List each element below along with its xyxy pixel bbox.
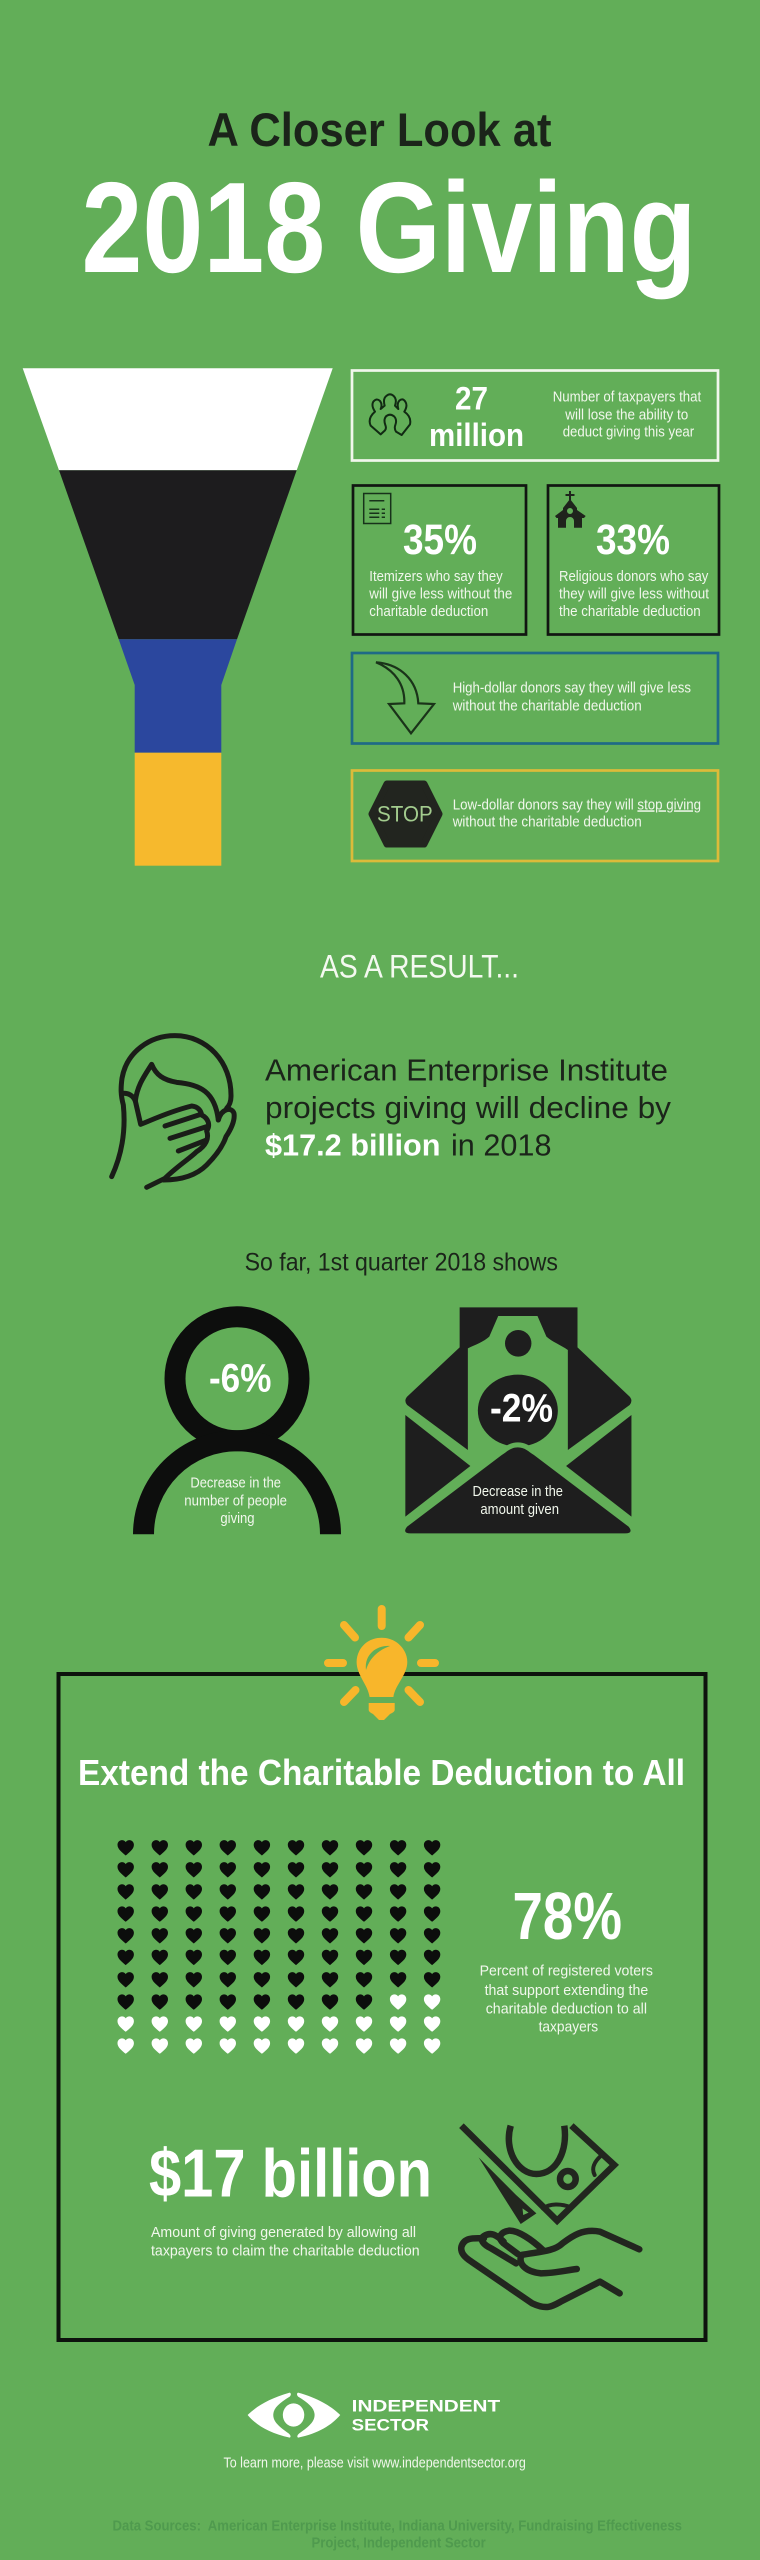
heading: first quarter: So far, 1st quarter 2018 shows <box>245 1249 558 1277</box>
description: giving generated: taxpayers to claim the charitable deduction <box>151 2243 420 2260</box>
wordmark: SECTOR <box>352 2416 429 2435</box>
text: data sources: Project, Independent Sector <box>312 2535 486 2552</box>
description: itemizers: charitable deduction <box>369 603 488 620</box>
icon: money in hand <box>461 2126 639 2307</box>
description: registered voters: Percent of registered voters <box>480 1963 653 1980</box>
panel: religious donors 33% <box>548 486 719 634</box>
logo: Independent Sector <box>248 2393 501 2438</box>
stat: 33%: 33% <box>596 516 670 564</box>
icon: people <box>370 394 410 435</box>
text: AEI projection: in 2018 <box>451 1128 552 1163</box>
title: A Closer Look at <box>208 103 552 156</box>
heading: as a result: AS A RESULT... <box>320 948 519 984</box>
text: AEI projection <box>265 1053 671 1163</box>
text: AEI projection: $17.2 billion <box>265 1128 440 1163</box>
description: high-dollar donors: without the charitable deduction <box>452 697 642 714</box>
description: registered voters: charitable deduction to all <box>486 2000 647 2017</box>
description: low-dollar donors: Low-dollar donors say they will stop giving <box>453 796 701 813</box>
icon: person <box>144 1317 330 1534</box>
text: data sources <box>112 2518 682 2552</box>
description: religious donors <box>559 568 710 620</box>
description: high-dollar donors: High-dollar donors say they will give less <box>453 680 691 697</box>
icon: stop sign: STOP <box>377 802 433 827</box>
stat: $17 billion: $17 billion <box>149 2136 432 2212</box>
text: learn more: To learn more, please visit www.independentsector.org <box>224 2455 526 2472</box>
heading: extend: Extend the Charitable Deduction to All <box>78 1752 685 1793</box>
stat: 78%: 78% <box>512 1879 622 1954</box>
icon: eye <box>248 2393 340 2438</box>
panel: extend the charitable deduction <box>58 1609 706 2340</box>
panel: envelope stat <box>405 1307 631 1533</box>
description: itemizers: will give less without the <box>368 585 512 602</box>
stat: 27 million: million <box>429 417 524 453</box>
description: religious donors: Religious donors who say <box>559 568 709 585</box>
stat: 27 million <box>429 380 524 453</box>
description: taxpayers: will lose the ability to <box>564 406 688 423</box>
icon: down arrow <box>376 662 434 733</box>
description: religious donors: the charitable deduction <box>559 603 701 620</box>
description: amount given: Decrease in the <box>472 1483 563 1500</box>
icon: document <box>364 494 391 524</box>
description: high-dollar donors <box>452 680 691 714</box>
description: itemizers: Itemizers who say they <box>369 568 503 585</box>
wordmark <box>352 2396 501 2435</box>
description: people giving: Decrease in the <box>190 1475 281 1492</box>
text: AEI projection: American Enterprise Institute <box>265 1053 668 1088</box>
icon: stop sign <box>372 784 439 844</box>
panel: 27 million taxpayers <box>352 370 718 460</box>
description: religious donors: they will give less without <box>559 585 710 602</box>
panel: low-dollar donors <box>352 770 718 861</box>
description: amount given <box>472 1483 563 1518</box>
title <box>82 103 696 300</box>
description: taxpayers: deduct giving this year <box>563 424 694 441</box>
stat: -2%: -2% <box>490 1387 553 1431</box>
description: registered voters: taxpayers <box>539 2019 598 2036</box>
description: people giving: giving <box>220 1510 255 1527</box>
wordmark: INDEPENDENT <box>352 2396 501 2415</box>
stat: 27 million: 27 <box>455 380 488 416</box>
description: people giving: number of people <box>184 1492 287 1509</box>
description: low-dollar donors: without the charitable deduction <box>452 814 642 831</box>
panel: person stat <box>144 1317 330 1534</box>
panel: itemizers 35% <box>353 486 526 634</box>
description: amount given: amount given <box>480 1501 559 1518</box>
stat: 35%: 35% <box>403 516 477 564</box>
description: registered voters <box>480 1963 653 2036</box>
description: taxpayers <box>553 389 702 441</box>
stat: -6%: -6% <box>209 1357 271 1401</box>
description: taxpayers: Number of taxpayers that <box>553 389 702 406</box>
funnel chart <box>23 368 333 866</box>
description: low-dollar donors <box>452 796 701 831</box>
panel: high-dollar donors <box>352 653 718 744</box>
description: itemizers <box>368 568 512 620</box>
icon: envelope with tag <box>405 1307 631 1533</box>
description: registered voters: that support extending the <box>485 1982 648 1999</box>
text: data sources: Data Sources: American Enterprise Institute, Indiana University, Fundraising Effectiveness <box>112 2518 682 2535</box>
chart: heart pictogram <box>118 1840 440 2054</box>
text: AEI projection: projects giving will decline by <box>265 1090 671 1125</box>
description: people giving <box>184 1475 287 1527</box>
description: giving generated <box>151 2224 420 2260</box>
icon: church <box>555 491 586 528</box>
description: giving generated: Amount of giving generated by allowing all <box>151 2224 416 2241</box>
icon: light bulb <box>328 1609 435 1720</box>
icon: face palm <box>112 1036 234 1187</box>
